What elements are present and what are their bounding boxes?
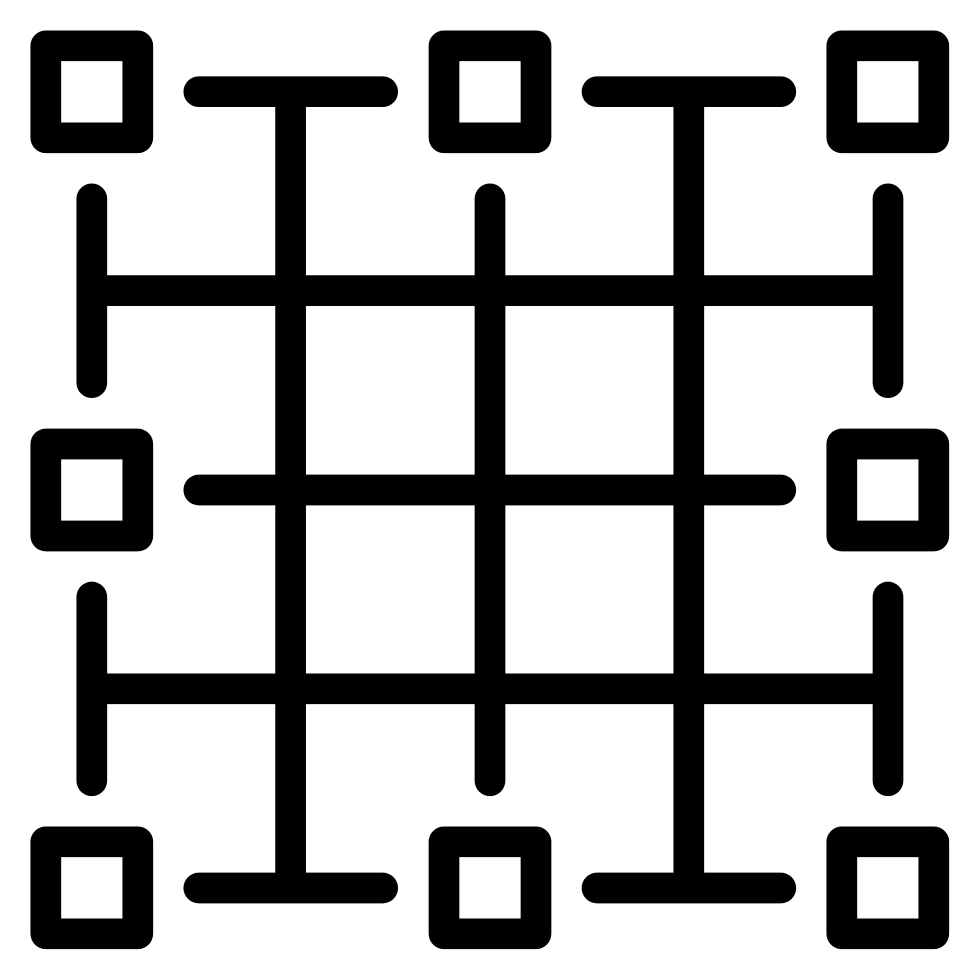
grid lines [92, 92, 888, 888]
